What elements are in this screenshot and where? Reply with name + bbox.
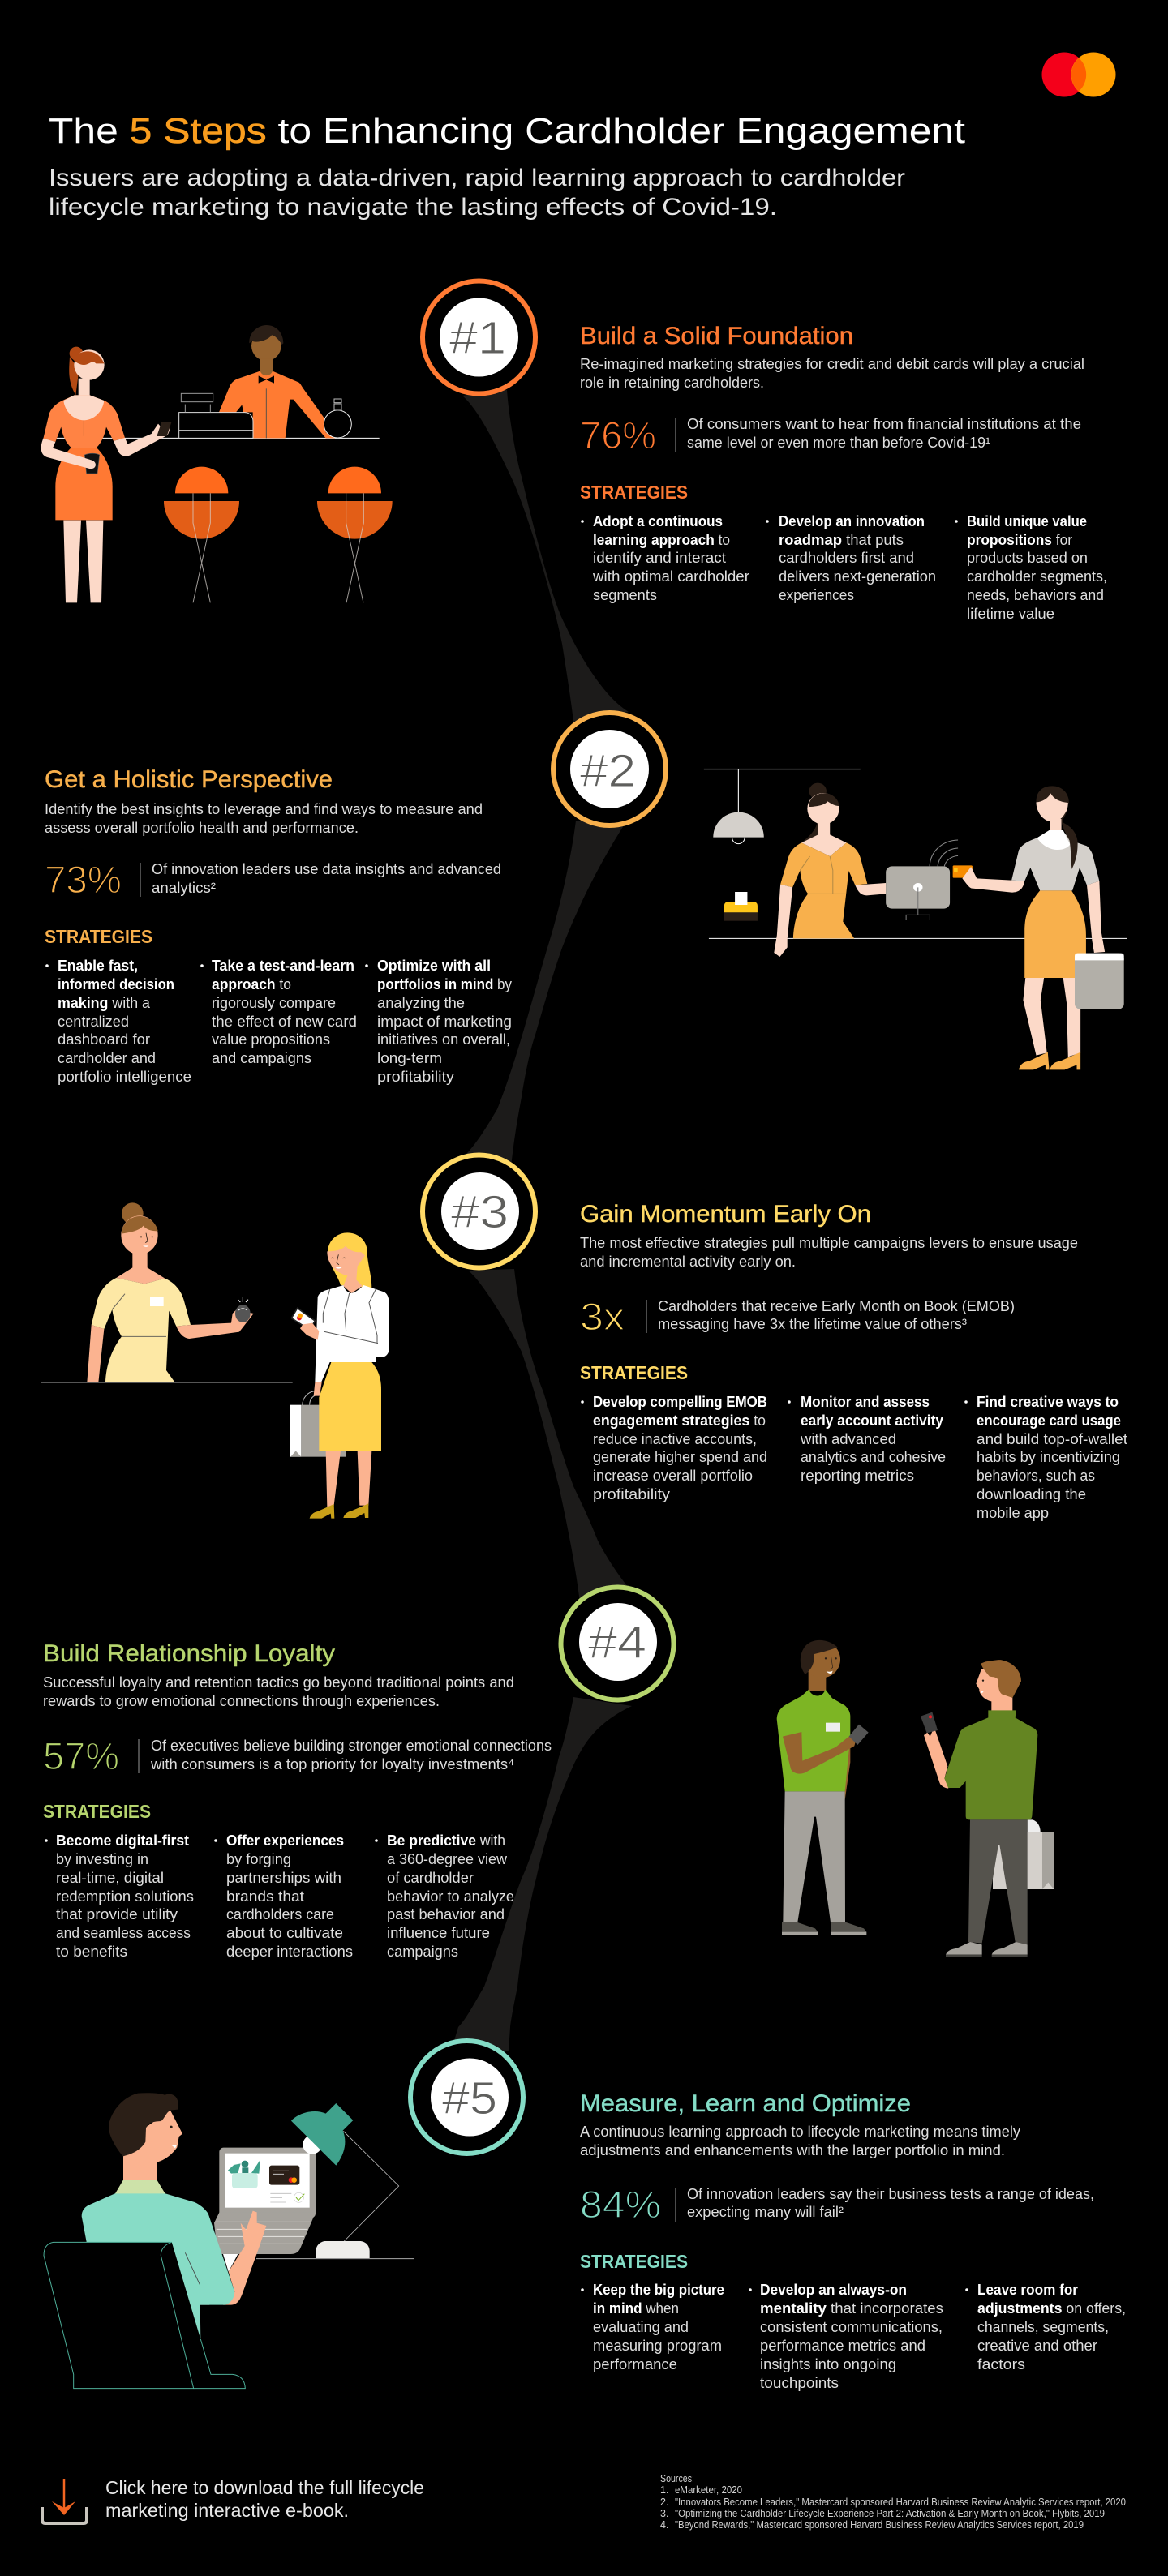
step 2 strategy: test and learn: value propositions [212,1031,330,1048]
step 4 description [43,1674,514,1709]
step 3 strategy: creative: encourage card usage [977,1412,1121,1429]
step 4 strategy: experiences: partnerships with [226,1870,341,1886]
step 4 stat: Of executives believe building stronger emotional connections [151,1738,552,1754]
step 3 strategy: creative: downloading the [977,1486,1086,1502]
step 4 strategy: digital-first: by investing in [56,1851,148,1867]
step 3 strategy: creative: behaviors, such as [977,1468,1095,1484]
download call to action [105,2477,424,2521]
step 3 strategy: monitor: Monitor and assess [801,1394,930,1410]
step 2 stat: 73% [45,858,122,901]
step 5 strategy: big picture: Keep the big picture [593,2282,724,2298]
step 2 strategy: optimize: analyzing the [377,995,465,1011]
step 4 strategy: digital-first: to benefits [56,1944,127,1960]
step 3 content [580,1201,1127,1521]
step badge 1 [423,281,535,394]
step 2 strategy: optimize: initiatives on overall, [377,1031,510,1048]
step 5 description: adjustments and enhancements with the larger portfolio in mind. [580,2142,1005,2158]
step 5 strategy: always-on: consistent communications, [760,2319,943,2335]
step 1 strategy: value propositions: Build unique value [967,513,1087,529]
step 2 strategy: decision making: Enable fast, [58,958,138,974]
step 1 stat: Of consumers want to hear from financial institutions at the [687,416,1081,432]
step 1 strategy: roadmap: Develop an innovation [779,513,925,529]
step 2 strategy: decision making: portfolio intelligence [58,1069,191,1085]
sources list: 1. [660,2484,668,2496]
illustration: associate and customer with contactless card [777,1640,1054,1957]
step 3 strategy: creative [964,1394,1127,1521]
step 3 strategy: monitor [788,1394,946,1484]
step 2 stat: analytics² [152,880,216,896]
step 2 stat: Of innovation leaders use data insights and advanced [152,861,501,877]
step 1 strategy: roadmap [766,513,936,603]
step 3 heading: Gain Momentum Early On [580,1201,871,1228]
sources list: 3. [660,2508,668,2519]
step 5 strategy: always-on: insights into ongoing [760,2356,896,2372]
step 4 strategy: digital-first: Become digital-first [56,1832,189,1849]
step 2 strategy: decision making [45,958,191,1085]
step 2 stat [45,858,501,901]
step 3 strategy: EMOB: generate higher spend and [593,1449,767,1465]
connector ribbon between steps [451,390,641,2051]
step 4 strategies heading: STRATEGIES [43,1801,151,1822]
sources list [660,2473,1126,2531]
step 1 strategy: value propositions: propositions for [967,532,1072,548]
step 2 strategy: test and learn: and campaigns [212,1050,311,1066]
step 3 strategy: creative: and build top-of-wallet [977,1431,1127,1447]
step 1 description: Re-imagined marketing strategies for credit and debit cards will play a crucial [580,356,1084,372]
step 3 strategy: EMOB [581,1394,767,1502]
step 5 stat [580,2183,1094,2226]
step 4 strategy: experiences: Offer experiences [226,1832,344,1849]
step 4 strategy: experiences: brands that [226,1888,304,1905]
step 2 strategy: test and learn: approach to [212,976,291,992]
step 4 strategy: experiences: about to cultivate [226,1925,343,1941]
step 5 stat: 84% [580,2183,661,2226]
step 3 strategy: EMOB: increase overall portfolio [593,1468,753,1484]
illustration: man at laptop with desk lamp [44,2093,414,2389]
step 4 strategy: predictive: of cardholder [387,1870,474,1886]
step 1 strategy: roadmap: delivers next-generation [779,568,936,585]
step 1 strategy: adopt: identify and interact [593,550,726,566]
subtitle: Issuers are adopting a data-driven, rapid learning approach to cardholder [49,165,905,191]
step 5 strategy: adjustments: channels, segments, [977,2319,1109,2335]
step 4 strategy: predictive: a 360-degree view [387,1851,508,1867]
step 2 strategies heading: STRATEGIES [45,926,152,947]
step 1 stat: 76% [580,414,656,456]
step 3 strategy: creative: Find creative ways to [977,1394,1119,1410]
sources list: "Innovators Become Leaders," Mastercard sponsored Harvard Business Review Analytic Services report, 2020 [675,2497,1126,2508]
step badge 2 [553,713,666,825]
step 5 strategy: big picture [581,2282,724,2372]
step 3 strategy: creative: mobile app [977,1505,1049,1521]
step 4 strategy: digital-first: and seamless access [56,1925,191,1941]
step 5 strategy: big picture: evaluating and [593,2319,689,2335]
step 2 strategy: optimize: long-term [377,1050,442,1066]
step 3 strategies heading: STRATEGIES [580,1362,688,1383]
step 1 strategy: value propositions [955,513,1107,622]
title: The 5 Steps to Enhancing Cardholder Engagement [49,111,965,151]
step 1 description: role in retaining cardholders. [580,375,764,391]
step 5 strategies heading: STRATEGIES [580,2251,688,2272]
step 4 stat: 57% [43,1734,119,1777]
step 1 description [580,356,1084,391]
step 3 description: and incremental activity early on. [580,1254,796,1270]
step 4 strategy: predictive [375,1832,514,1960]
step 1 stat: same level or even more than before Covid-19¹ [687,435,990,451]
step 3 stat: messaging have 3x the lifetime value of others³ [658,1316,967,1332]
step 5 strategy: adjustments: Leave room for [977,2282,1078,2298]
illustration: associate and shopper with mobile payment [41,1202,389,1519]
step 2 description: Identify the best insights to leverage and find ways to measure and [45,801,483,817]
step 2 description [45,801,483,836]
step 1 strategy: roadmap: cardholders first and [779,550,914,566]
step badge 5: #5 [442,2072,497,2124]
step badge 2: #2 [580,745,636,797]
step 2 strategy: decision making: cardholder and [58,1050,156,1066]
step badge 3: #3 [451,1186,509,1238]
step 1 strategy: value propositions: lifetime value [967,606,1054,622]
step 3 stat [580,1295,1015,1338]
step 3 strategy: monitor: with advanced [800,1431,896,1447]
download call to action: marketing interactive e-book. [105,2500,349,2521]
step 5 strategy: adjustments: adjustments on offers, [977,2300,1126,2317]
subtitle [49,165,905,221]
step 1 strategy: adopt: learning approach to [593,532,730,548]
step 5 strategy: big picture: performance [593,2356,677,2372]
step 5 strategy: always-on: performance metrics and [760,2338,925,2354]
step 1 strategy: value propositions: needs, behaviors and [967,587,1104,603]
step 3 stat: Cardholders that receive Early Month on Book (EMOB) [658,1298,1015,1314]
step 5 stat: expecting many will fail² [687,2204,844,2220]
step 4 strategy: digital-first: redemption solutions [56,1888,194,1905]
step 4 strategy: predictive: Be predictive with [387,1832,505,1849]
step 1 strategy: adopt: Adopt a continuous [593,513,723,529]
sources list: 2. [660,2497,668,2508]
step 4 strategy: digital-first [45,1832,194,1960]
step 2 description: assess overall portfolio health and performance. [45,820,359,836]
logo: Mastercard circles [1041,52,1116,97]
step 2 strategy: decision making: centralized [58,1014,129,1030]
step 5 content [580,2090,1126,2391]
step 4 strategy: digital-first: real-time, digital [56,1870,164,1886]
subtitle: lifecycle marketing to navigate the lasting effects of Covid-19. [49,194,777,221]
step 3 strategy: monitor: analytics and cohesive [801,1449,946,1465]
icon: download arrow and tray [42,2479,87,2523]
step 1 strategy: roadmap: experiences [779,587,854,603]
step 5 description [580,2124,1020,2158]
step 1 strategies heading: STRATEGIES [580,482,688,503]
step 3 strategy: EMOB: engagement strategies to [593,1412,766,1429]
step 5 heading: Measure, Learn and Optimize [580,2090,911,2117]
step 2 heading: Get a Holistic Perspective [45,766,333,793]
step 3 strategy: monitor: reporting metrics [801,1468,914,1484]
step 2 strategy: optimize: portfolios in mind by [377,976,512,992]
step 1 strategy: adopt: with optimal cardholder [592,568,749,585]
step 5 strategy: always-on [749,2282,943,2391]
step 5 stat: Of innovation leaders say their business tests a range of ideas, [687,2186,1094,2202]
sources list: "Beyond Rewards," Mastercard sponsored Harvard Business Review Analytics Services report, 2019 [675,2519,1084,2531]
step 4 strategy: experiences: cardholders care [226,1906,334,1922]
step 2 strategy: optimize [365,958,512,1085]
step 4 strategy: experiences [214,1832,353,1960]
step 2 strategy: test and learn: rigorously compare [212,995,336,1011]
step badge 4 [561,1588,673,1699]
step 4 strategy: digital-first: that provide utility [56,1906,178,1922]
step badge 4: #4 [588,1617,646,1669]
step 1 heading: Build a Solid Foundation [580,323,853,349]
step 2 content [45,766,512,1085]
step 3 strategy: EMOB: Develop compelling EMOB [593,1394,767,1410]
step 5 strategy: big picture: in mind when [593,2300,679,2317]
step 1 strategy: adopt: segments [593,587,657,603]
step 1 strategy: value propositions: cardholder segments, [967,568,1107,585]
step 5 description: A continuous learning approach to lifecycle marketing means timely [580,2124,1020,2140]
sources list: Sources: [660,2473,694,2484]
step 3 description [580,1235,1078,1270]
step 3 strategy: creative: habits by incentivizing [977,1449,1120,1465]
step 5 strategy: always-on: mentality that incorporates [760,2300,943,2317]
step badge 5 [410,2041,523,2154]
step 5 strategy: adjustments: factors [977,2356,1025,2372]
step 4 stat [43,1734,552,1777]
step 1 stat [580,414,1081,456]
step 4 heading: Build Relationship Loyalty [43,1640,335,1667]
step 5 strategy: adjustments: creative and other [977,2338,1097,2354]
step 3 strategy: EMOB: reduce inactive accounts, [593,1431,757,1447]
step 4 strategy: predictive: past behavior and [387,1906,505,1922]
step 1 strategy: value propositions: products based on [967,550,1088,566]
step 1 strategy: roadmap: roadmap that puts [779,532,904,548]
step 4 strategy: predictive: influence future [387,1925,490,1941]
step 4 strategy: experiences: by forging [226,1851,291,1867]
illustration: bar scene with customer and bartender [41,325,393,602]
step 5 strategy: big picture: measuring program [593,2338,722,2354]
step 2 strategy: test and learn: the effect of new card [212,1014,357,1030]
sources list: eMarketer, 2020 [675,2484,742,2496]
step 3 strategy: monitor: early account activity [801,1412,943,1429]
step 4 stat: with consumers is a top priority for loyalty investments⁴ [150,1756,514,1772]
step 2 strategy: test and learn: Take a test-and-learn [212,958,354,974]
sources list: 4. [660,2519,668,2531]
step 2 strategy: decision making: dashboard for [58,1031,150,1048]
step 4 strategy: experiences: deeper interactions [226,1944,353,1960]
step 2 strategy: test and learn [200,958,357,1066]
step 4 strategy: predictive: behavior to analyze [387,1888,514,1905]
step 1 strategy: adopt [581,513,749,603]
step 2 strategy: optimize: Optimize with all [377,958,491,974]
step 2 strategy: optimize: profitability [377,1069,454,1085]
download call to action: Click here to download the full lifecycle [105,2477,424,2498]
step 3 description: The most effective strategies pull multiple campaigns levers to ensure usage [580,1235,1078,1251]
step 3 strategy: EMOB: profitability [593,1486,670,1502]
step 4 strategy: predictive: campaigns [387,1944,458,1960]
step 4 content [43,1640,552,1960]
step 5 strategy: adjustments [965,2282,1126,2372]
step 5 strategy: always-on: touchpoints [760,2375,839,2391]
step 2 strategy: decision making: informed decision [58,976,174,992]
sources list: "Optimizing the Cardholder Lifecycle Experience Part 2: Activation & Early Month on Book," Flybits, 2019 [675,2508,1105,2519]
step 4 description: Successful loyalty and retention tactics go beyond traditional points and [43,1674,514,1691]
illustration: two women at checkout tapping a card [704,769,1127,1069]
step badge 1: #1 [449,312,506,364]
step 1 content [580,323,1107,622]
step 2 strategy: decision making: making with a [58,995,151,1011]
step 5 strategy: always-on: Develop an always-on [760,2282,907,2298]
step 4 description: rewards to grow emotional connections through experiences. [43,1693,440,1709]
step 3 stat: 3x [580,1295,625,1338]
step badge 3 [423,1155,535,1268]
step 2 strategy: optimize: impact of marketing [377,1014,512,1030]
